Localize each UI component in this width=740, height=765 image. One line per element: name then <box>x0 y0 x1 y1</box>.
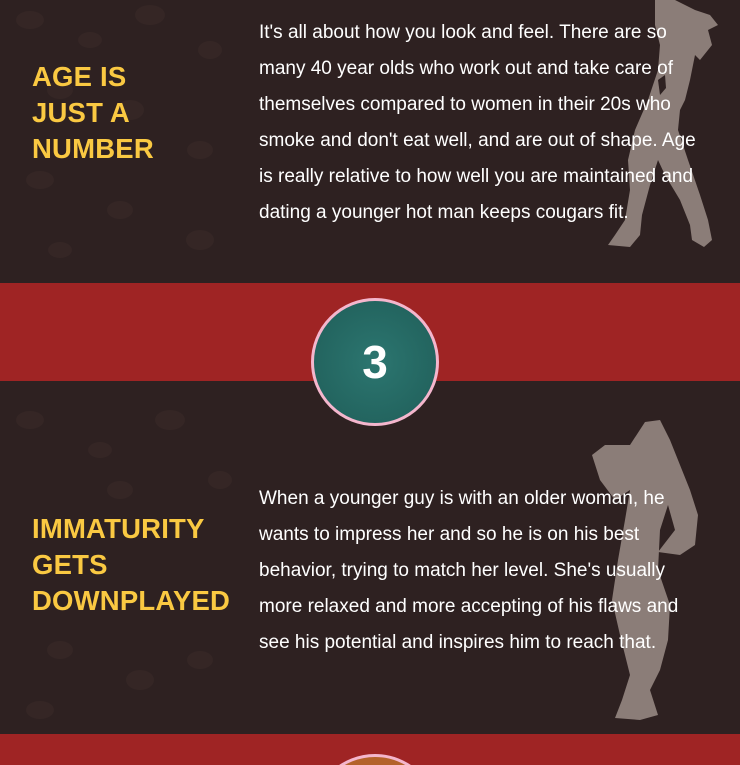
silhouette 1 <box>608 0 718 247</box>
number circle 3: 3 <box>362 336 388 388</box>
text block 1: dating a younger hot man keeps cougars fit. <box>259 202 629 223</box>
heading: age is just a number <box>32 61 154 164</box>
number circle 3 <box>311 298 439 426</box>
text block 1: smoke and don't eat well, and are out of shape. Age <box>259 130 696 151</box>
text block 2: wants to impress her and so he is on his best <box>259 524 639 545</box>
red band 1 <box>0 283 740 381</box>
red band 2 with partial number circle 4 <box>0 734 740 765</box>
text block 1: is really relative to how well you are maintained and <box>259 166 693 187</box>
text block 2 <box>259 488 678 653</box>
heading: immaturity gets downplayed <box>32 513 230 616</box>
text block 2: behavior, trying to match her level. She's usually <box>259 560 665 581</box>
text block 1 <box>259 22 696 223</box>
heading: age is just a number: AGE IS <box>32 61 126 92</box>
text block 2: more relaxed and more accepting of his flaws and <box>259 596 678 617</box>
heading: immaturity gets downplayed: IMMATURITY <box>32 513 205 544</box>
text block 1: themselves compared to women in their 20s who <box>259 94 671 115</box>
heading: age is just a number: NUMBER <box>32 133 154 164</box>
number circle 4 (partial) <box>339 754 411 765</box>
heading: immaturity gets downplayed: DOWNPLAYED <box>32 585 230 616</box>
heading: immaturity gets downplayed: GETS <box>32 549 108 580</box>
text block 1: many 40 year olds who work out and take care of <box>259 58 673 79</box>
heading: age is just a number: JUST A <box>32 97 130 128</box>
text block 2: see his potential and inspires him to reach that. <box>259 632 656 653</box>
text block 1: It's all about how you look and feel. There are so <box>259 22 667 43</box>
text block 2: When a younger guy is with an older woman, he <box>259 488 665 509</box>
silhouette 2 <box>592 420 698 720</box>
